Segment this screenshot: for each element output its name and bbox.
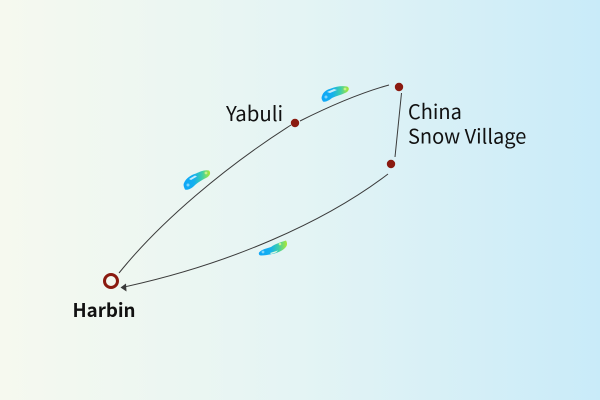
marker: Yabuli xyxy=(291,119,299,127)
label: Harbin: Harbin xyxy=(72,296,136,323)
label: Yabuli: Yabuli xyxy=(225,97,283,127)
marker: Harbin xyxy=(104,274,118,288)
route: Yabuli to China Snow Village xyxy=(300,85,389,121)
icon: car, China Snow Village to Harbin xyxy=(259,240,287,256)
route: China Snow Village back to Harbin xyxy=(124,174,388,287)
arrowhead at Harbin xyxy=(120,284,126,292)
marker: China Snow Village south xyxy=(387,160,395,168)
icon: car, Yabuli to China Snow Village xyxy=(322,86,349,102)
marker: China Snow Village north xyxy=(395,83,403,91)
route: within China Snow Village xyxy=(395,93,402,157)
route: Harbin to Yabuli xyxy=(119,125,291,273)
label: China Snow Village: Snow Village xyxy=(408,120,526,150)
icon: car, Harbin to Yabuli xyxy=(184,170,210,190)
label: China Snow Village: China xyxy=(408,96,462,125)
